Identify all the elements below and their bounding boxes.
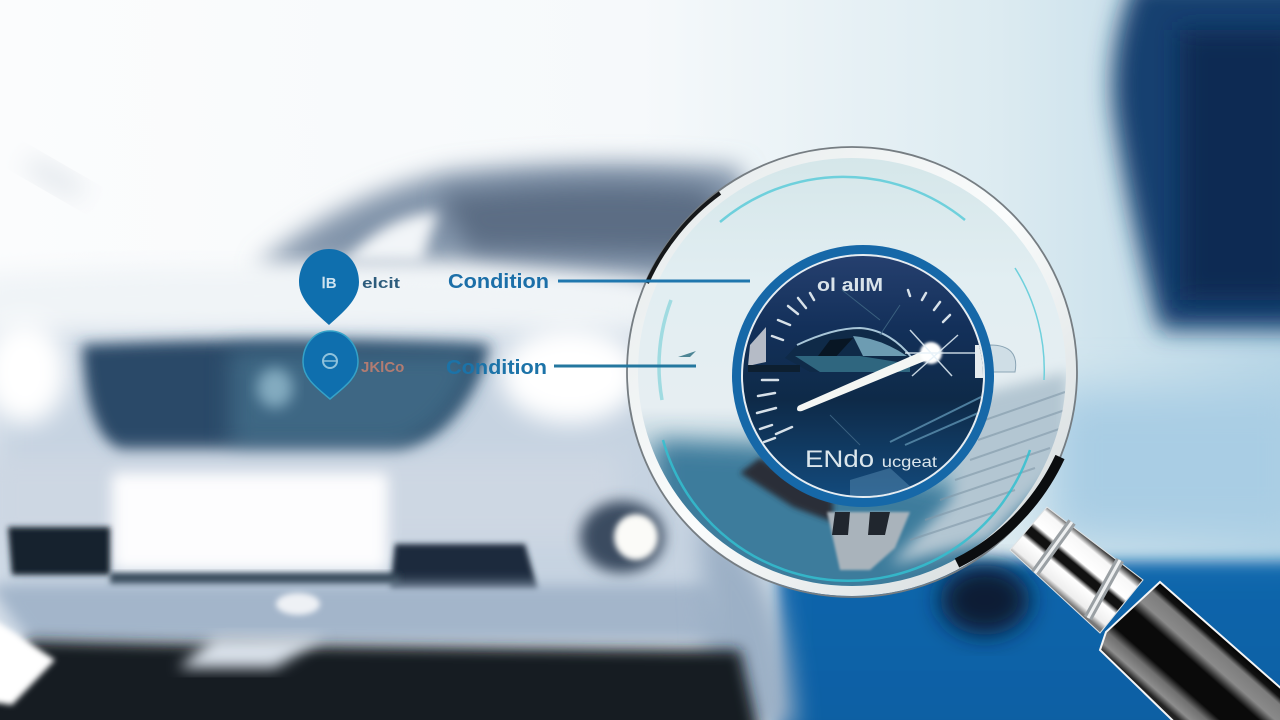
- blurred car: [0, 162, 795, 720]
- handle: chrome collar: [1010, 507, 1143, 633]
- lens: [554, 147, 1080, 640]
- lens: cyan inner rings: [663, 440, 1030, 581]
- handle: black grip: [1100, 582, 1280, 720]
- lens: pointer line 1: [558, 280, 750, 282]
- car: roof and windshield: [255, 162, 760, 290]
- gauge: car silhouette: [748, 290, 990, 500]
- pin 1: ⅠB: [321, 275, 337, 292]
- car: lower body: [0, 585, 730, 640]
- car: fog light: [580, 501, 664, 573]
- lens: reflected road: [647, 421, 1035, 586]
- car: bumper: [0, 455, 620, 545]
- lens: rim: [627, 147, 1077, 597]
- gauge: tick marks: [757, 290, 950, 442]
- gauge: needle glint: [905, 330, 978, 376]
- car: hood: [0, 268, 640, 325]
- gauge: [732, 245, 994, 507]
- lens: small mark: [678, 351, 696, 357]
- pin 2: [303, 331, 358, 399]
- car: ground shadow: [0, 640, 760, 720]
- car: body haze: [0, 325, 760, 650]
- label 2: JKlCo: [361, 359, 404, 376]
- lens: pointer line 2: [554, 364, 696, 368]
- heading: condition 1: Condition: [448, 271, 549, 293]
- car: grille: [82, 340, 490, 452]
- handle: [1010, 507, 1280, 720]
- car: lower intakes: [8, 527, 110, 575]
- magnifying glass: [554, 147, 1280, 720]
- car: headlights: [0, 320, 67, 424]
- gauge: bottom label: ENdo ucgeat: [805, 446, 938, 473]
- label 1: elcit: [362, 275, 400, 292]
- heading: condition 2: Condition: [446, 357, 547, 379]
- gauge: needle: [797, 350, 932, 411]
- gauge: top label: ol aIIM: [817, 275, 883, 295]
- pin 1: [299, 249, 359, 325]
